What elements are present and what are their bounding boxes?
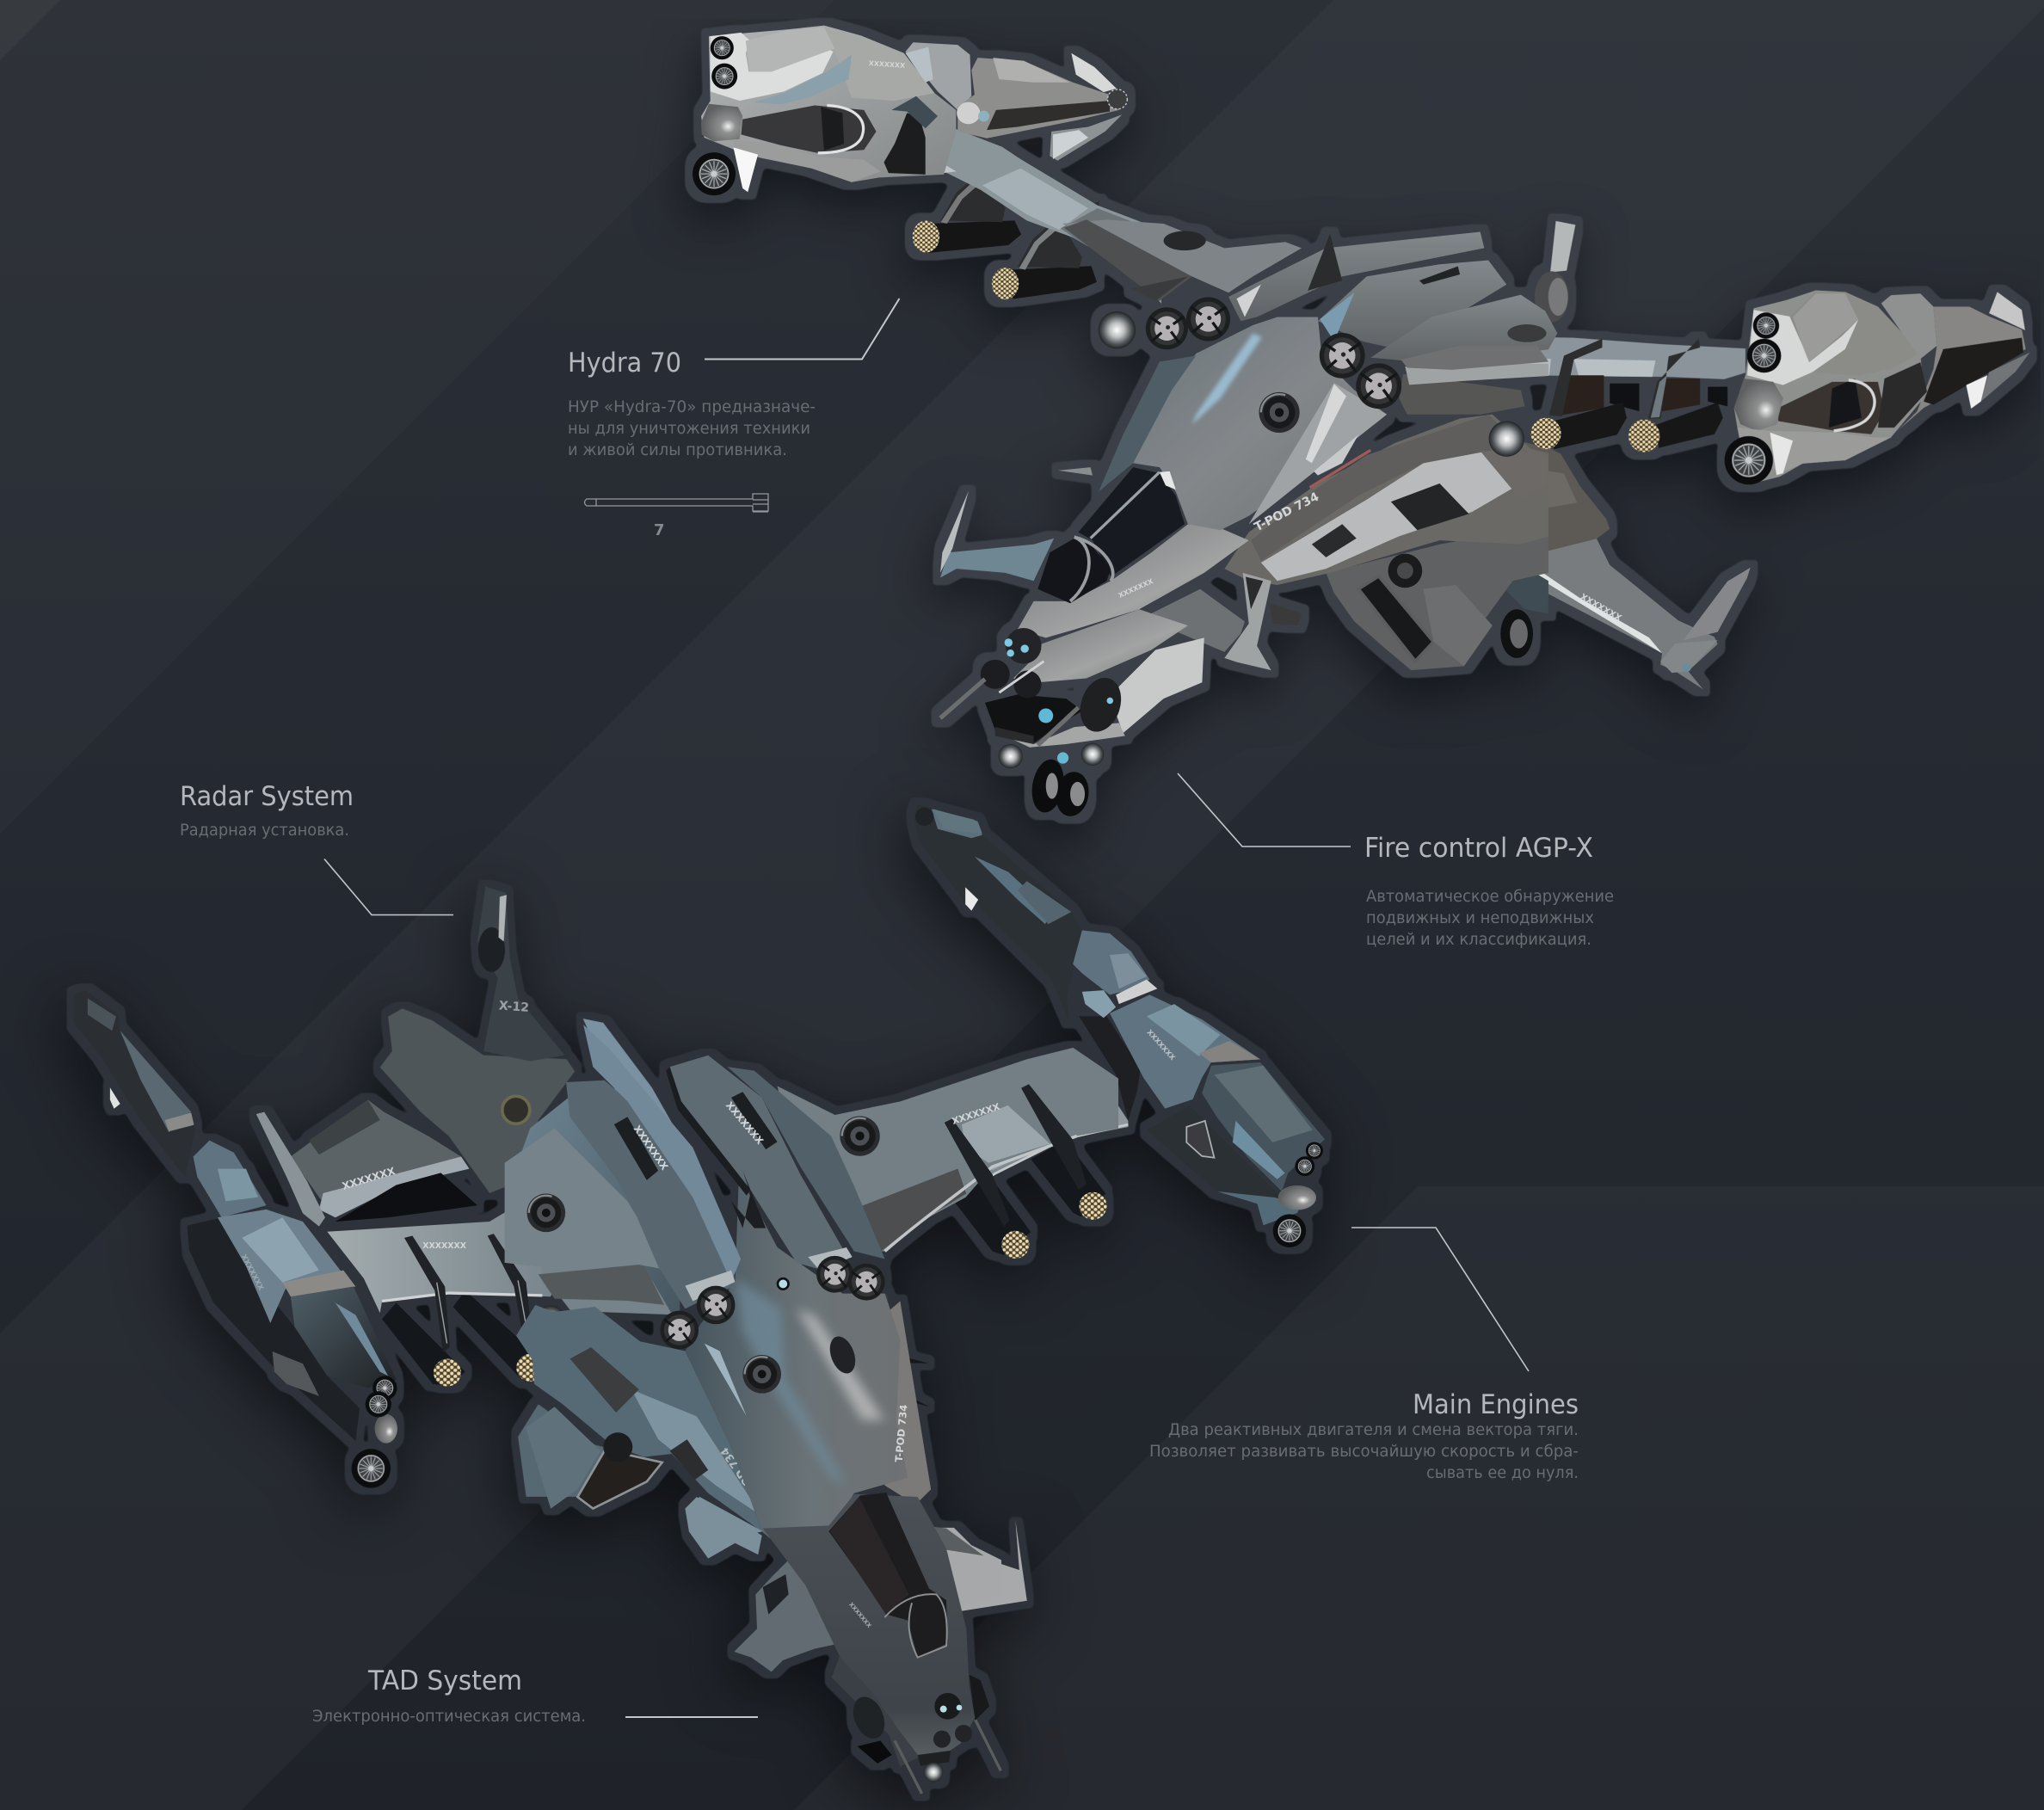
pod landing wheel	[693, 152, 736, 195]
blue sheen	[735, 1278, 847, 1486]
main upper hull	[1133, 317, 1387, 530]
description	[568, 397, 816, 459]
pod landing wheel	[1273, 1214, 1306, 1247]
markings: xxxxxxx: XXXXXXX	[1579, 593, 1623, 624]
right winglet	[923, 1520, 1027, 1612]
chin bulb	[999, 744, 1023, 768]
leader line	[1178, 773, 1351, 847]
pod landing wheel	[352, 1449, 391, 1488]
marking: t-pod: T-POD 734	[893, 1404, 910, 1462]
markings: xxxxxxx: XXXXXXX	[869, 59, 905, 70]
right engine pod	[913, 804, 1325, 1247]
engine nozzle 2	[1186, 297, 1230, 341]
pod wheel 1	[372, 1376, 397, 1401]
right gun	[975, 1719, 1000, 1770]
right wing and rockets	[778, 1048, 1118, 1255]
wheel gear behind hull	[1497, 564, 1548, 658]
indicator	[778, 1278, 789, 1290]
engine pods	[566, 1025, 885, 1308]
description: НУР «Hydra-70» предназначе-	[568, 397, 816, 416]
bottom ship: left section	[73, 887, 680, 1497]
wing to hull	[505, 1129, 670, 1271]
marking: xxxxxxx: XXXXXXX	[631, 1124, 670, 1173]
description: сывать ее до нуля.	[1426, 1463, 1579, 1482]
rear hull	[1518, 440, 1610, 558]
rosette 4	[1079, 1192, 1107, 1220]
top ship	[693, 26, 2030, 819]
side pod	[970, 1675, 989, 1721]
wing edge highlight	[895, 1124, 1128, 1225]
rear tail wing	[1511, 539, 1751, 689]
lower body	[518, 1307, 680, 1497]
stub wing and fin	[1143, 573, 1302, 670]
nozzle 2	[697, 1286, 735, 1324]
right hull rim	[870, 1294, 931, 1505]
description: Электронно-оптическая система.	[312, 1707, 586, 1726]
pylon	[1549, 339, 1602, 416]
wing tip panel	[961, 1105, 1049, 1170]
marking: wing xxxxxxx: XXXXXXX	[951, 1101, 1002, 1127]
engine nozzle 4	[1356, 363, 1401, 409]
launcher tube	[1551, 403, 1627, 449]
canard wing	[940, 467, 1093, 581]
nozzle 4	[848, 1264, 885, 1301]
engine ribs	[514, 1096, 680, 1327]
callout: Radar System	[180, 781, 453, 915]
top ship: inner right launcher	[1531, 339, 1627, 449]
hull hatch	[527, 1194, 565, 1232]
rocket label: 7	[654, 521, 665, 539]
rocket launcher 2	[992, 201, 1099, 299]
pod wheel 2	[366, 1391, 391, 1417]
canopy	[828, 1493, 948, 1658]
marking: xxxxxxx: XXXXXXX	[239, 1253, 265, 1292]
mount ring	[502, 1096, 530, 1124]
description: Два реактивных двигателя и смена вектора тяги.	[1168, 1420, 1579, 1439]
rosette 2	[1628, 420, 1659, 453]
leader line	[324, 859, 453, 915]
marking: xxxxxxx: XXXXXXX	[847, 1601, 872, 1629]
lower body	[516, 1305, 764, 1559]
leader line	[1351, 1228, 1529, 1371]
wing hatch	[1164, 231, 1206, 250]
description: Радарная установка.	[180, 821, 349, 840]
description: ны для уничтожения техники	[568, 419, 810, 438]
lamp	[535, 1306, 566, 1337]
markings: t-pod: T-POD 734	[1253, 490, 1321, 534]
pod	[693, 26, 1127, 195]
marking: xxxxxxx: XXXXXXX	[1145, 1028, 1178, 1062]
main hull	[685, 1174, 908, 1570]
bottom ship: nose section	[686, 1493, 1001, 1794]
hull hatch 2	[742, 1355, 781, 1394]
description	[1149, 1420, 1579, 1482]
tail wing	[256, 1099, 477, 1227]
wing edge highlight	[382, 1293, 542, 1301]
light sheen	[797, 1308, 885, 1420]
right pod landing wheel	[1725, 436, 1773, 484]
pod wheel 2	[1295, 1156, 1314, 1176]
right wing	[920, 1525, 1001, 1611]
wing lamp	[1489, 421, 1524, 457]
description: подвижных и неподвижных	[1366, 908, 1594, 927]
callout: Fire control AGP-X	[1178, 773, 1614, 949]
nose lamp cluster	[918, 1693, 972, 1782]
pod wheel 1	[1306, 1142, 1323, 1159]
tail lamp	[1099, 311, 1136, 348]
blue pod ridge	[583, 1019, 680, 1210]
marking: t-pod mirrored: T-POD 734	[717, 1445, 764, 1504]
nozzle 1	[660, 1311, 699, 1349]
callout: Hydra 70	[568, 299, 900, 539]
heading: Fire control AGP-X	[1364, 833, 1593, 864]
hull left shoulder	[1099, 355, 1196, 491]
nose tube	[1013, 609, 1188, 682]
heading: Radar System	[180, 781, 354, 812]
wing hatch	[840, 1116, 880, 1156]
cockpit neck	[1018, 524, 1249, 637]
description: Позволяет развивать высочайшую скорость и сбра-	[1149, 1442, 1579, 1461]
callout: TAD System	[312, 1665, 758, 1726]
central wing root	[1062, 219, 1302, 301]
lower hull with intake	[1326, 524, 1548, 670]
pod front wheel 1	[711, 36, 734, 59]
hatch	[527, 1193, 566, 1232]
marking: X-12: X-12	[498, 1000, 530, 1015]
wing	[1511, 336, 1745, 418]
launcher support	[1559, 375, 1604, 416]
heading: Main Engines	[1413, 1389, 1579, 1420]
description: целей и их классификация.	[1366, 930, 1591, 949]
bottom ship: right wing and pod	[895, 804, 1325, 1247]
lower fuselage	[832, 1654, 923, 1766]
top ship: right wing, engine pod, tail wing	[1511, 221, 2030, 689]
central hull joint	[522, 1099, 680, 1315]
rear launcher supports	[1610, 379, 1727, 448]
top engines	[1228, 231, 1557, 415]
callout: Main Engines	[1149, 1228, 1579, 1482]
rocket launcher 1	[913, 158, 1021, 253]
heading: TAD System	[367, 1665, 522, 1696]
hull hatch 3	[825, 1333, 860, 1377]
lower side pod	[686, 1497, 763, 1555]
description: и живой силы противника.	[568, 440, 787, 459]
nozzle 3	[816, 1256, 853, 1293]
heading: Hydra 70	[568, 348, 681, 379]
leader line	[705, 299, 900, 360]
rosette 1	[434, 1358, 461, 1387]
white stripes	[1249, 383, 1387, 524]
wing	[895, 1050, 1128, 1225]
description: Автоматическое обнаружение	[1366, 887, 1614, 906]
bottom ship: centre section	[505, 1025, 1118, 1612]
engine nozzle 3	[1320, 333, 1365, 379]
hull hatch	[1259, 392, 1300, 433]
markings: xxxxxxx hull: XXXXXXX	[1117, 577, 1155, 600]
stripe marks	[705, 1344, 747, 1416]
marking: wing xxxxxxx: XXXXXXX	[422, 1241, 467, 1251]
description	[1366, 887, 1614, 949]
rear plate	[380, 1008, 575, 1193]
pod front wheel 2	[711, 64, 737, 89]
rocket launchers	[382, 1290, 542, 1386]
landing gear	[1028, 743, 1104, 819]
stub wing	[734, 1560, 854, 1671]
chin guns	[858, 1740, 922, 1794]
tail rudder	[1535, 221, 1575, 323]
top ship: left wing, rockets and engine pod	[693, 26, 1161, 304]
flap	[539, 1265, 664, 1305]
rosette 2	[516, 1354, 544, 1382]
left engine pod	[73, 990, 397, 1488]
rocket drawing	[585, 494, 768, 512]
rosette 3	[1001, 1231, 1029, 1259]
nose body	[763, 1494, 975, 1762]
top ship: fuselage	[940, 219, 1557, 819]
wing	[904, 129, 1161, 304]
pylons	[404, 1234, 533, 1352]
canopy	[1037, 467, 1185, 603]
mid hull dark band and panels	[1224, 415, 1548, 585]
radar fin	[477, 887, 564, 1062]
right pod front wheel 1	[1753, 312, 1779, 339]
marking: xxxxxxx 2: XXXXXXX	[723, 1099, 766, 1147]
rosette 1	[1531, 418, 1561, 449]
tail hub	[915, 808, 933, 826]
engine nozzle 1	[1146, 307, 1188, 349]
right pod front wheel 2	[1747, 339, 1781, 372]
marking: xxxxxxx: XXXXXXX	[341, 1165, 397, 1192]
bottom ship	[73, 804, 1325, 1794]
blue sheen	[1192, 333, 1262, 425]
chin panel	[1115, 637, 1204, 733]
wing	[327, 1185, 567, 1313]
side disc	[847, 1692, 890, 1743]
leader line	[625, 1716, 758, 1718]
nose cluster	[940, 628, 1128, 748]
right pod	[1725, 290, 2030, 484]
